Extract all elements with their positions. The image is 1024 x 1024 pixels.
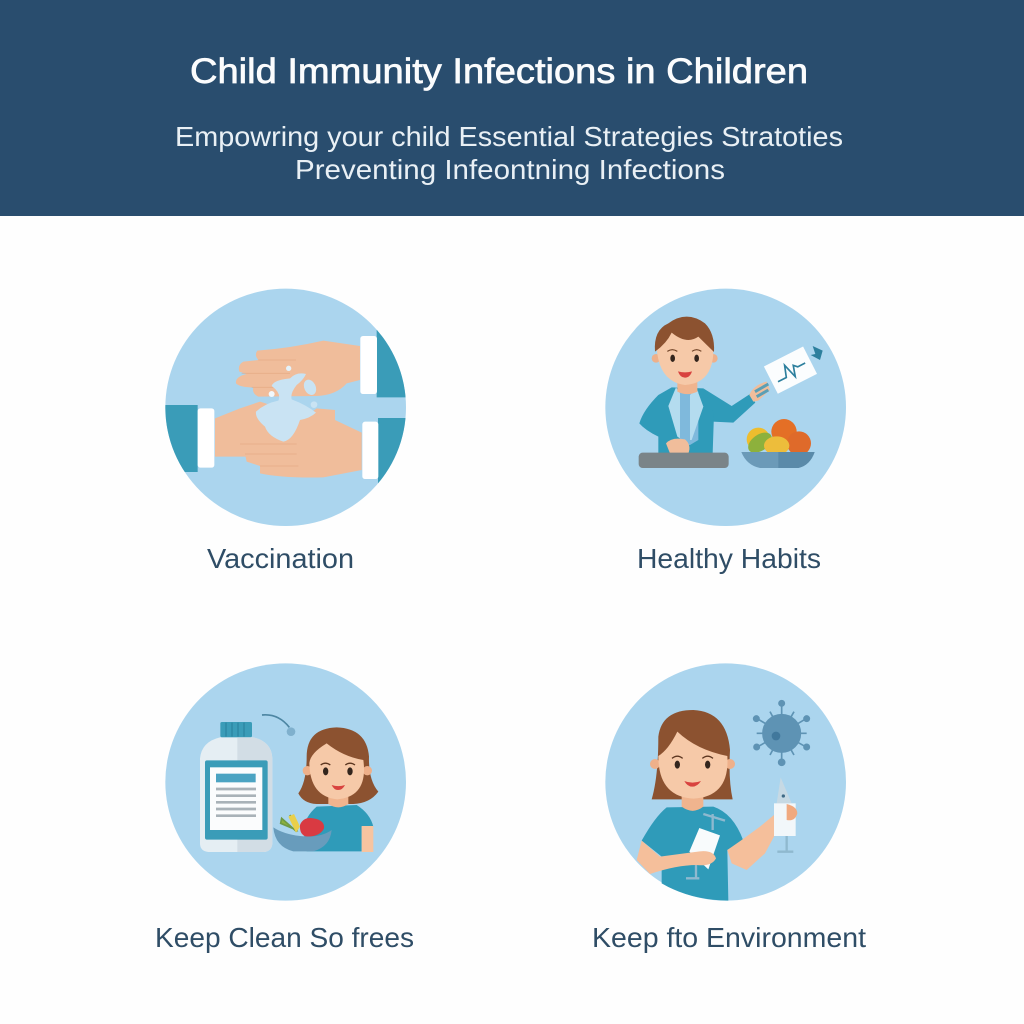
fruit xyxy=(747,428,770,451)
finger lines xyxy=(240,360,298,466)
subtitle: Preventing Infeontning Infections xyxy=(295,154,725,185)
held syringe xyxy=(686,814,725,878)
raised syringe xyxy=(777,835,793,852)
panel: healthy habits xyxy=(605,289,846,574)
panel: keep clean xyxy=(155,663,414,953)
label: Vaccination: Vaccination xyxy=(207,543,354,574)
bottle xyxy=(200,737,272,852)
header banner xyxy=(0,0,1024,216)
heartbeat card xyxy=(764,346,817,394)
label: Keep fto Environment: Keep fto Environment xyxy=(592,922,866,953)
hand on desk xyxy=(666,439,689,453)
arm xyxy=(703,388,755,423)
neck xyxy=(682,793,703,811)
bottle cap xyxy=(220,722,252,737)
arm left xyxy=(637,841,716,874)
bottle label xyxy=(205,760,268,840)
hair xyxy=(652,710,733,799)
face xyxy=(650,759,660,769)
label: Healthy Habits: Healthy Habits xyxy=(637,543,821,574)
title: Child Immunity Infections in Children xyxy=(190,52,808,91)
soap foam xyxy=(256,373,316,442)
shirt xyxy=(642,807,743,901)
lower right hand xyxy=(241,408,362,477)
bowl xyxy=(741,452,815,468)
upper hand xyxy=(236,341,360,397)
arm right xyxy=(727,815,779,870)
virus xyxy=(754,701,809,765)
girl neck and face xyxy=(328,793,348,807)
subtitle xyxy=(175,121,843,185)
subtitle: Empowring your child Essential Strategies Stratoties xyxy=(175,121,843,152)
icon: woman with syringes and virus xyxy=(605,663,846,901)
jacket xyxy=(639,387,714,453)
desk xyxy=(639,453,729,468)
bowl xyxy=(273,827,332,851)
icon: bottle and girl xyxy=(165,663,406,901)
motion mark xyxy=(262,715,289,727)
girl shirt xyxy=(303,805,373,851)
lower left hand xyxy=(215,402,307,457)
panel: vaccination xyxy=(157,289,413,574)
icon: doctor with fruit bowl xyxy=(605,289,846,526)
icon: washing hands xyxy=(157,289,413,526)
fruit xyxy=(281,815,297,832)
panel: keep environment xyxy=(592,663,866,953)
neck and head xyxy=(677,377,697,394)
label: Keep Clean So frees: Keep Clean So frees xyxy=(155,922,414,953)
girl hair xyxy=(298,727,378,804)
cuffs xyxy=(376,330,406,398)
